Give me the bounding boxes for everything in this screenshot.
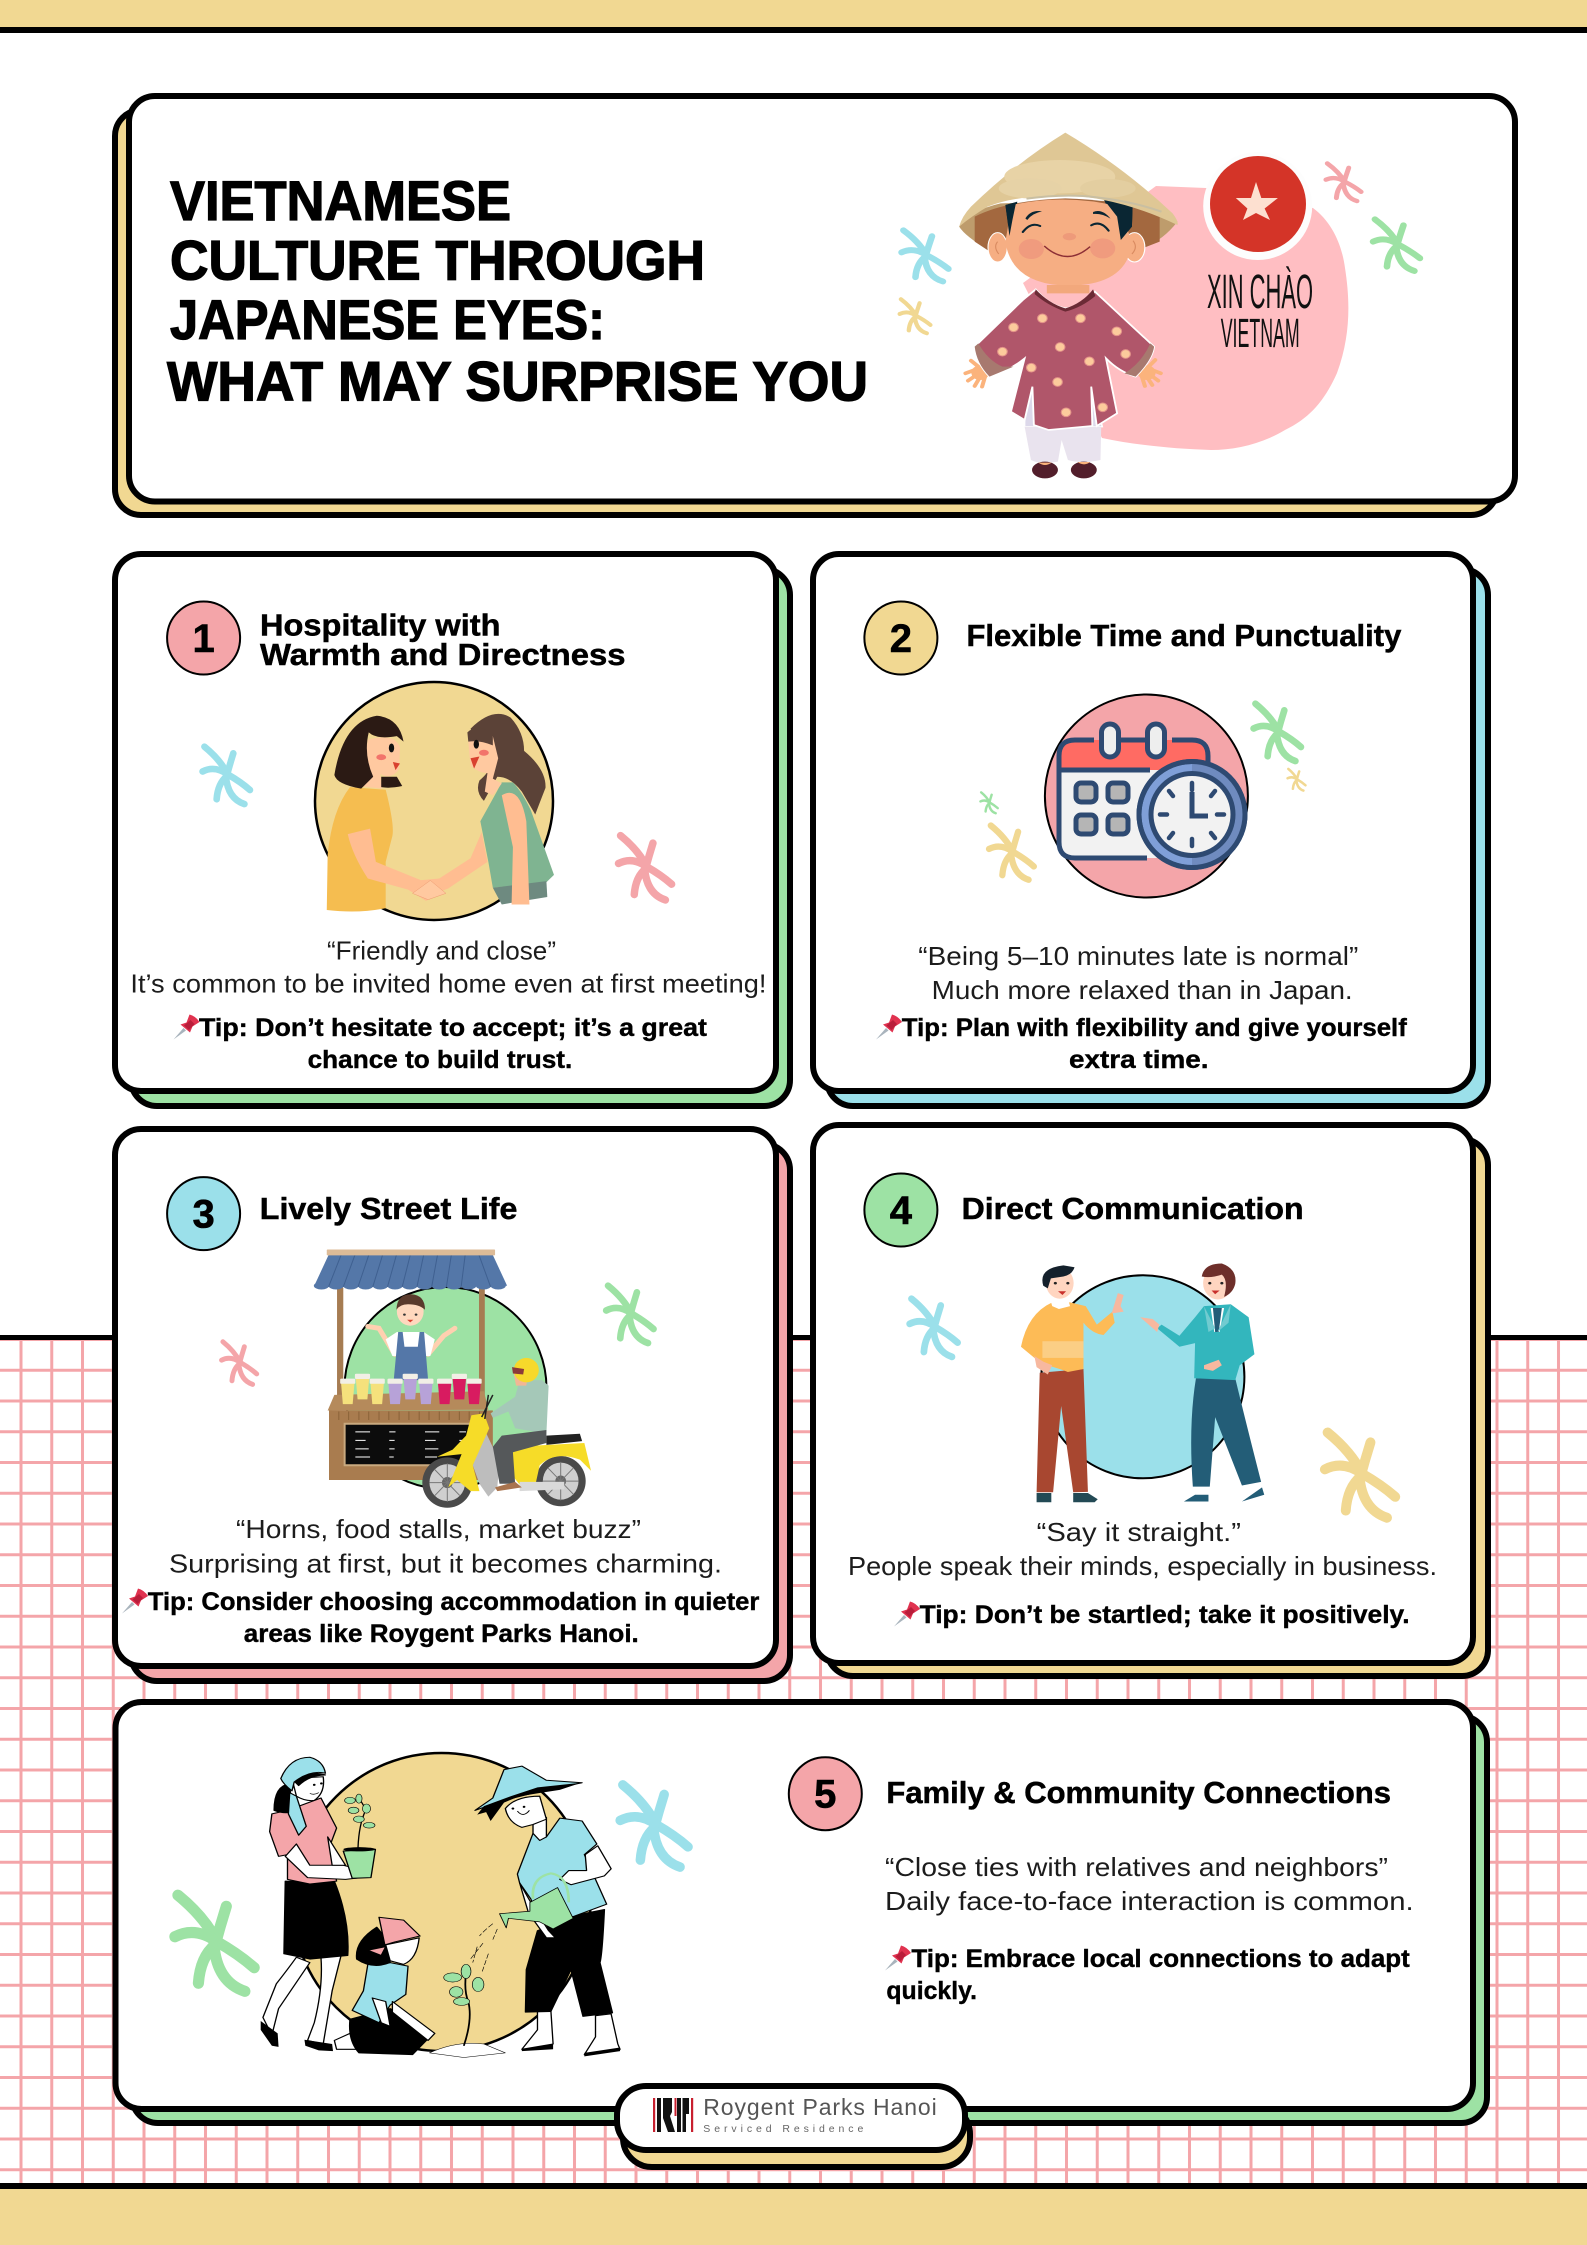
number badge 2 (864, 602, 937, 674)
icon: burst pink (222, 1342, 257, 1384)
panel: card 1 hospitality (115, 554, 790, 1106)
card 1 body text (130, 936, 766, 998)
card 5 body text: “Close ties with relatives and neighbors” (885, 1852, 1388, 1882)
heading: WHAT MAY SURPRISE YOU (167, 350, 868, 412)
number badge 4: 4 (890, 1189, 913, 1233)
card 2 tip: extra time. (1069, 1046, 1208, 1074)
card 3 body text: “Horns, food stalls, market buzz” (236, 1514, 641, 1544)
logo pill body (617, 2086, 965, 2150)
card 1 body text: It’s common to be invited home even at first meeting! (130, 968, 766, 998)
card 3 tip: Tip: Consider choosing accommodation in quieter (148, 1588, 760, 1616)
card 2 tip: Tip: Plan with flexibility and give yourself (902, 1014, 1407, 1042)
number badge 3 (167, 1177, 240, 1250)
logo text (703, 2094, 937, 2135)
card 1 body text: “Friendly and close” (327, 936, 556, 966)
card 5 body text: Daily face-to-face interaction is common. (885, 1886, 1414, 1916)
card 3 tip (122, 1588, 760, 1648)
icon: burst yellow (900, 299, 930, 333)
logo pill shadow (623, 2105, 970, 2167)
icon: burst yellow (1325, 1432, 1395, 1518)
card 3 tip: areas like Roygent Parks Hanoi. (244, 1620, 639, 1648)
illustration: gardening family (261, 1753, 620, 2057)
card 1 heading: Hospitality with (260, 608, 500, 642)
card 2 body text: Much more relaxed than in Japan. (932, 975, 1353, 1005)
number badge 3: 3 (192, 1192, 215, 1236)
icon: burst yellow (989, 826, 1034, 880)
title panel shadow (115, 110, 1497, 515)
icon: burst small green (980, 792, 998, 813)
card 4 body (813, 1125, 1473, 1663)
icon: burst pink (1326, 163, 1361, 201)
logo mark (653, 2098, 693, 2132)
illustration: street stall and motorbike (314, 1249, 591, 1508)
card 2 heading: Flexible Time and Punctuality (966, 618, 1402, 653)
title panel card (129, 96, 1515, 502)
card 2 body text: “Being 5–10 minutes late is normal” (918, 941, 1358, 971)
card 3 body text: Surprising at first, but it becomes charming. (169, 1548, 722, 1578)
card 3 body text (169, 1514, 722, 1578)
panel: card 4 communication (813, 1125, 1488, 1676)
icon: burst green (175, 1895, 254, 1991)
card 5 heading: Family & Community Connections (886, 1775, 1391, 1810)
bottom band (0, 2183, 1587, 2245)
card 2 body (813, 554, 1473, 1091)
illustration: two men talking (1021, 1264, 1264, 1502)
number badge 2: 2 (890, 617, 912, 661)
card 2 body text (918, 941, 1358, 1005)
card 1 body (115, 554, 776, 1091)
card 4 shadow (827, 1139, 1488, 1676)
heading: VIETNAMESE (170, 169, 511, 232)
card 4 body text (848, 1517, 1437, 1581)
illustration: calendar and clock (1045, 694, 1248, 898)
card 3 heading: Lively Street Life (260, 1191, 517, 1226)
card 5 shadow (132, 1716, 1487, 2123)
flag badge (1203, 152, 1312, 260)
card 5 tip (885, 1945, 1410, 2005)
icon: burst green (1373, 219, 1420, 271)
card 2 shadow (827, 569, 1488, 1106)
top band (0, 0, 1587, 33)
icon: burst small yellow (1288, 769, 1306, 791)
card 1 shadow (131, 569, 790, 1106)
heading: CULTURE THROUGH (170, 228, 705, 292)
card 4 heading: Direct Communication (962, 1191, 1304, 1226)
card 4 body text: People speak their minds, especially in business. (848, 1551, 1437, 1581)
card 5 body text (885, 1852, 1414, 1916)
card 5 tip: quickly. (886, 1977, 977, 2005)
panel: logo pill (617, 2086, 970, 2167)
number badge 5 (789, 1757, 862, 1830)
card 3 body (115, 1129, 776, 1666)
icon: burst pink (619, 836, 672, 900)
icon: burst green (1254, 704, 1301, 761)
icon: burst green (606, 1286, 654, 1343)
heading (167, 169, 868, 412)
icon: burst blue (910, 1299, 958, 1357)
panel: card 3 street life (115, 1129, 790, 1681)
card 1 tip (174, 1014, 708, 1074)
pink blob (1023, 186, 1348, 450)
card 4 body text: “Say it straight.” (1037, 1517, 1241, 1547)
greeting text: VIETNAM (1221, 310, 1300, 356)
character in conical hat (959, 133, 1178, 478)
panel: card 2 time (813, 554, 1488, 1106)
grid pattern background (0, 1335, 1587, 2184)
heading: JAPANESE EYES: (170, 288, 605, 351)
card 1 tip: chance to build trust. (308, 1046, 572, 1074)
number badge 5: 5 (814, 1772, 836, 1816)
logo text: Serviced Residence (703, 2123, 863, 2135)
card 2 tip (876, 1014, 1407, 1074)
greeting text (1207, 266, 1313, 356)
card 1 heading (260, 608, 626, 672)
card 1 tip: Tip: Don’t hesitate to accept; it’s a great (199, 1014, 708, 1042)
number badge 1: 1 (192, 617, 215, 661)
icon: burst blue (620, 1785, 688, 1867)
card 4 tip: Tip: Don’t be startled; take it positively. (920, 1601, 1410, 1629)
card 5 body (116, 1702, 1473, 2109)
logo text: Roygent Parks Hanoi (703, 2094, 937, 2120)
number badge 4 (864, 1174, 937, 1246)
panel: card 5 family (116, 1702, 1487, 2123)
illustration: handshake (315, 682, 554, 920)
number badge 1 (167, 602, 240, 674)
card 3 shadow (131, 1144, 790, 1681)
card 1 heading: Warmth and Directness (260, 637, 626, 672)
icon: burst blue (203, 747, 250, 804)
card 5 tip: Tip: Embrace local connections to adapt (911, 1945, 1410, 1973)
panel: title: XIN CHÀO (1207, 266, 1313, 319)
panel: title (115, 96, 1515, 515)
icon: burst blue (902, 230, 948, 281)
